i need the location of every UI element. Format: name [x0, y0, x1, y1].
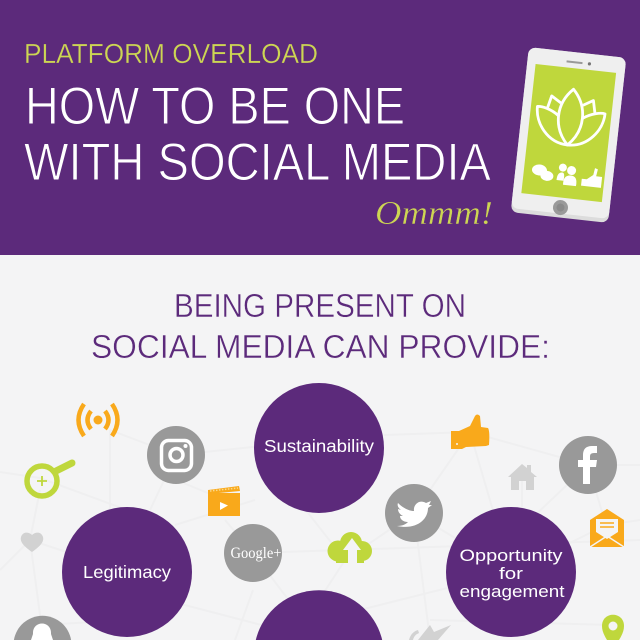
circle: Legitimacy — [62, 507, 192, 637]
section heading: BEING PRESENT ON — [174, 287, 466, 324]
lotus — [534, 86, 607, 149]
eyebrow heading: PLATFORM OVERLOAD — [24, 38, 318, 69]
icon: house — [508, 464, 537, 490]
icon: megaphone — [409, 625, 451, 640]
icon: facebook — [559, 436, 617, 494]
icon: envelope — [590, 509, 624, 547]
icon: thumbs up — [451, 414, 489, 449]
icon: google plus — [224, 524, 282, 582]
icon: google plus: Google+ — [230, 545, 282, 562]
icon: video clapper — [208, 486, 240, 516]
circle: Opportunity for engagement — [446, 507, 576, 637]
small phone icons — [531, 160, 603, 189]
main title — [24, 77, 492, 192]
circle: Legitimacy: Legitimacy — [83, 562, 171, 582]
tagline: Ommm! — [375, 195, 493, 232]
icon: magnifier — [27, 463, 72, 496]
main title: HOW TO BE ONE — [25, 77, 405, 136]
icon: phone with lotus — [511, 47, 626, 223]
circle: Sustainability — [254, 383, 384, 513]
header band — [0, 0, 640, 255]
circle: Opportunity for engagement: Opportunity — [460, 546, 563, 565]
section heading — [91, 287, 550, 365]
icon: user in grey circle — [14, 616, 71, 640]
icon: heart — [21, 533, 43, 552]
icon: broadcast signal — [78, 404, 118, 436]
circle: Opportunity for engagement: for — [499, 564, 523, 583]
section heading: SOCIAL MEDIA CAN PROVIDE: — [91, 328, 550, 365]
circle: Opportunity for engagement: engagement — [460, 582, 565, 601]
icon: cloud upload — [328, 532, 372, 564]
icon: instagram — [147, 426, 205, 484]
circle: Sustainability: Sustainability — [264, 436, 374, 456]
main title: WITH SOCIAL MEDIA — [24, 133, 492, 192]
circle: bottom — [256, 590, 382, 640]
icon: location pin — [602, 615, 624, 640]
icon: twitter — [385, 484, 443, 542]
